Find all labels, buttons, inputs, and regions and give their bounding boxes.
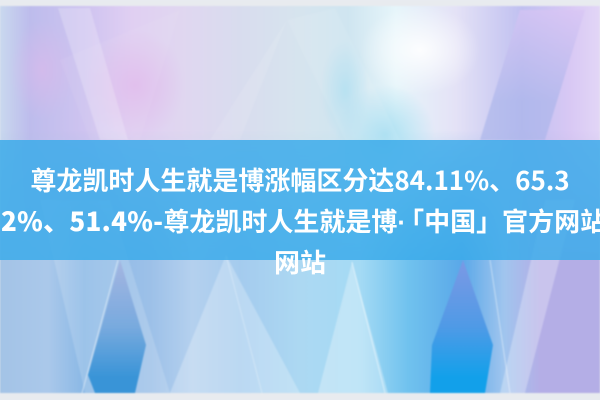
title: 网站 bbox=[274, 243, 326, 280]
title: 2%、51.4%-尊龙凯时人生就是博·「中国」官方网站 bbox=[1, 202, 600, 239]
title band bbox=[0, 140, 600, 260]
title: 尊龙凯时人生就是博涨幅区分达84.11%、65.3 bbox=[30, 161, 570, 198]
title bbox=[1, 161, 600, 280]
